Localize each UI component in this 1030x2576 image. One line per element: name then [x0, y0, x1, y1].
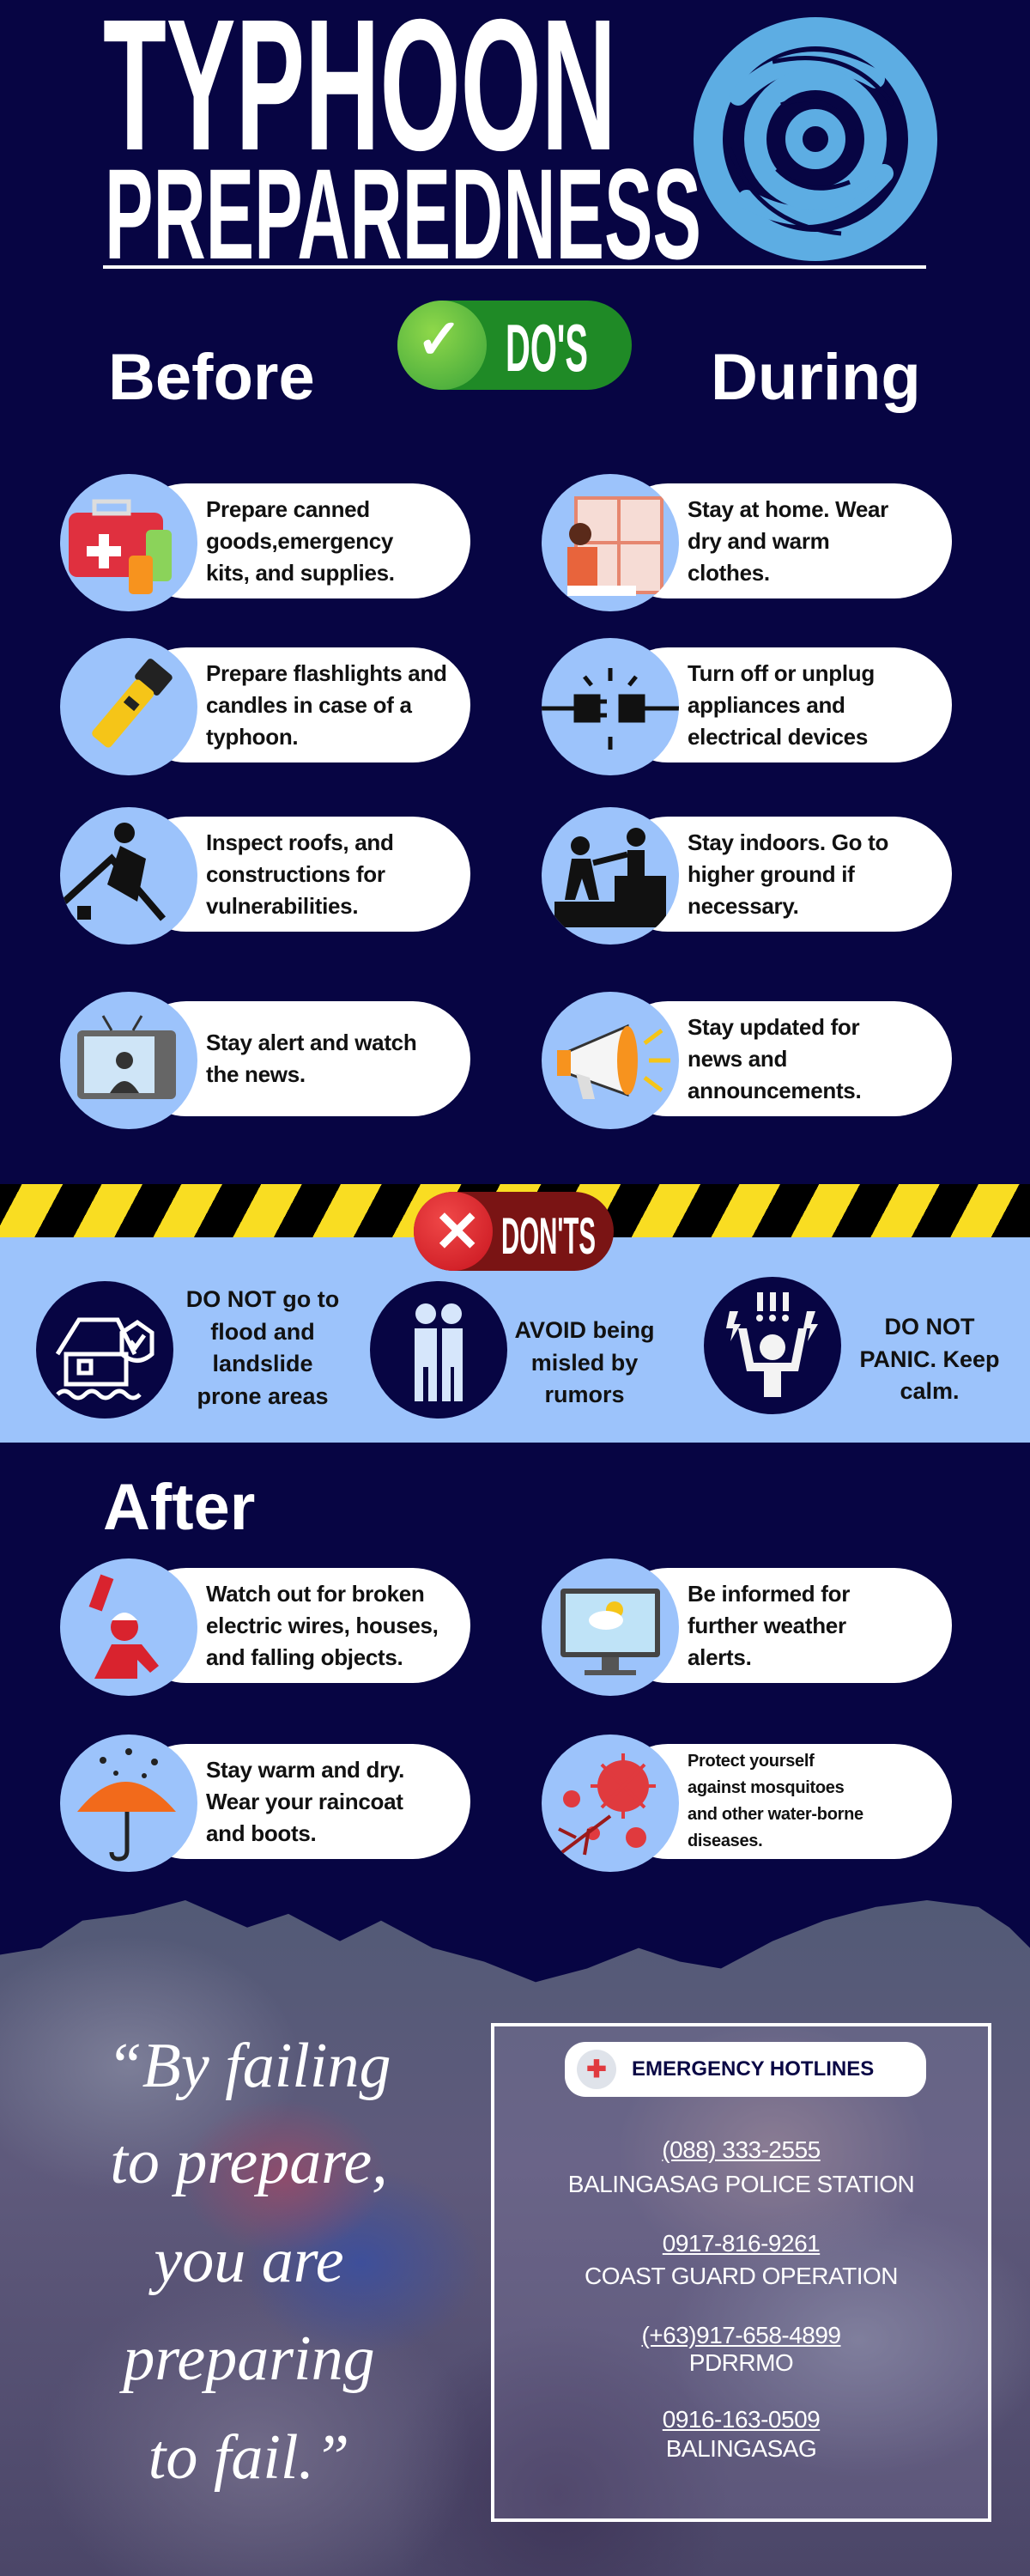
quote: “By failing — [107, 2031, 391, 2101]
badge: DON'TS — [414, 1192, 614, 1271]
row: before 3: Inspect roofs, and — [206, 829, 394, 855]
row: after 2: Stay warm and dry. — [206, 1757, 404, 1783]
row: after 3: Be informed for — [688, 1580, 850, 1606]
dont 3 text: PANIC. Keep — [859, 1346, 1000, 1372]
icon: emergency kit — [69, 500, 172, 594]
icon: umbrella — [77, 1748, 176, 1862]
dont 1 text: flood and — [210, 1319, 315, 1345]
hotline 3: PDRRMO — [689, 2349, 793, 2376]
hotline 4: BALINGASAG — [666, 2435, 816, 2462]
row: during 1: dry and warm — [688, 527, 829, 553]
dont 1 text: landslide — [212, 1351, 313, 1376]
row: during 1 — [542, 474, 952, 611]
icon: flashlight — [92, 659, 173, 747]
dont 1 text: prone areas — [197, 1382, 329, 1408]
row: after 4 — [542, 1735, 952, 1872]
photo background — [0, 1893, 1030, 2576]
row: during 3 — [542, 807, 952, 945]
hotline 2 — [585, 2230, 898, 2289]
row: before 4: Stay alert and watch — [206, 1030, 416, 1055]
row: after 2: Wear your raincoat — [206, 1788, 403, 1814]
row: during 2: Turn off or unplug — [688, 659, 875, 685]
row: after 2: and boots. — [206, 1820, 316, 1846]
icon: phone — [577, 2050, 616, 2089]
row: during 3: higher ground if — [688, 860, 855, 886]
row: after 1: electric wires, houses, — [206, 1613, 439, 1638]
row: after 4: Protect yourself — [688, 1752, 814, 1771]
dont 1 text — [186, 1286, 339, 1408]
dont 3 icon: panic — [704, 1277, 841, 1414]
icon: tv news — [77, 1015, 176, 1099]
hotline 2: COAST GUARD OPERATION — [585, 2263, 898, 2289]
row: after 4: against mosquitoes — [688, 1778, 844, 1797]
row: during 2: electrical devices — [688, 723, 868, 749]
heading: Before: Before — [108, 341, 315, 414]
row: after 4: diseases. — [688, 1832, 762, 1850]
dont 1 icon: flooded house — [36, 1281, 173, 1419]
row: after 3 — [542, 1558, 952, 1696]
dont 2 text — [514, 1317, 654, 1407]
panel: emergency hotlines — [491, 2023, 991, 2522]
dont 3 text: calm. — [900, 1378, 960, 1404]
dont 2 text: AVOID being — [514, 1317, 654, 1343]
hazard stripe — [0, 1184, 1030, 1237]
badge: DO'S: ✓ — [416, 308, 463, 370]
row: before 1: kits, and supplies. — [206, 560, 395, 586]
title — [103, 0, 926, 283]
hotline 1: (088) 333-2555 — [662, 2136, 821, 2163]
quote: to prepare, — [110, 2127, 388, 2197]
row: before 4 — [60, 992, 470, 1129]
heading: After: After — [103, 1471, 255, 1544]
dont 2 text: misled by — [531, 1350, 638, 1376]
icon: megaphone — [557, 1024, 670, 1099]
icon: weather monitor — [560, 1589, 660, 1675]
icon: higher ground — [554, 828, 666, 927]
hotlines header pill — [565, 2042, 926, 2097]
quote — [107, 2031, 391, 2493]
row: during 4 — [542, 992, 952, 1129]
icon: falling objects — [89, 1575, 159, 1679]
row: after 1: and falling objects. — [206, 1643, 403, 1669]
hotline 4: 0916-163-0509 — [663, 2406, 820, 2433]
dont 3 text: DO NOT — [884, 1314, 975, 1340]
hotline 1: BALINGASAG POLICE STATION — [568, 2171, 914, 2197]
row: before 2: Prepare flashlights and — [206, 659, 447, 685]
hotline 3 — [641, 2322, 841, 2376]
row: before 2: candles in case of a — [206, 692, 412, 718]
icon: woman at window — [567, 496, 663, 596]
hotlines header pill: EMERGENCY HOTLINES — [632, 2057, 874, 2081]
dont 2 text: rumors — [544, 1382, 625, 1407]
row: during 4: news and — [688, 1046, 787, 1072]
hotline 4 — [663, 2406, 821, 2462]
row: during 4: announcements. — [688, 1077, 861, 1103]
row: after 4: and other water-borne — [688, 1805, 863, 1824]
row: before 4: the news. — [206, 1061, 306, 1087]
row: during 3: necessary. — [688, 893, 799, 919]
icon: unplug — [542, 668, 679, 750]
hotline 1 — [568, 2136, 914, 2197]
row: after 2 — [60, 1735, 470, 1872]
row: after 3: alerts. — [688, 1643, 752, 1669]
panel: don'ts — [0, 1237, 1030, 1443]
row: before 1 — [60, 474, 470, 611]
quote: you are — [148, 2226, 344, 2296]
icon: roof inspection — [64, 823, 166, 921]
row: before 3: vulnerabilities. — [206, 893, 358, 919]
badge: DO'S — [397, 301, 632, 390]
row: during 3: Stay indoors. Go to — [688, 829, 888, 855]
row: during 1: clothes. — [688, 560, 770, 586]
icon: phone: ✚ — [586, 2056, 607, 2082]
badge: DON'TS: ✕ — [433, 1200, 481, 1263]
quote: to fail.” — [148, 2422, 349, 2493]
row: during 1: Stay at home. Wear — [688, 496, 888, 522]
row: before 2: typhoon. — [206, 723, 298, 749]
dont 2 icon: rumors — [370, 1281, 507, 1419]
row: after 3: further weather — [688, 1613, 846, 1638]
row: during 2 — [542, 638, 952, 775]
heading: During: During — [711, 341, 921, 414]
dont 3 text — [859, 1314, 1000, 1404]
dont 1 text: DO NOT go to — [186, 1286, 339, 1312]
row: before 3 — [60, 807, 470, 945]
row: during 4: Stay updated for — [688, 1013, 859, 1039]
quote: preparing — [118, 2324, 375, 2394]
row: before 1: Prepare canned — [206, 496, 370, 522]
row: during 2: appliances and — [688, 692, 845, 718]
row: after 1: Watch out for broken — [206, 1580, 424, 1606]
row: before 3: constructions for — [206, 860, 385, 886]
hotline 3: (+63)917-658-4899 — [641, 2322, 841, 2348]
icon: typhoon swirl — [694, 17, 937, 261]
row: after 1 — [60, 1558, 470, 1696]
row: before 2 — [60, 638, 470, 775]
hotline 2: 0917-816-9261 — [663, 2230, 820, 2257]
icon: virus mosquito — [558, 1753, 656, 1855]
row: before 1: goods,emergency — [206, 527, 393, 553]
